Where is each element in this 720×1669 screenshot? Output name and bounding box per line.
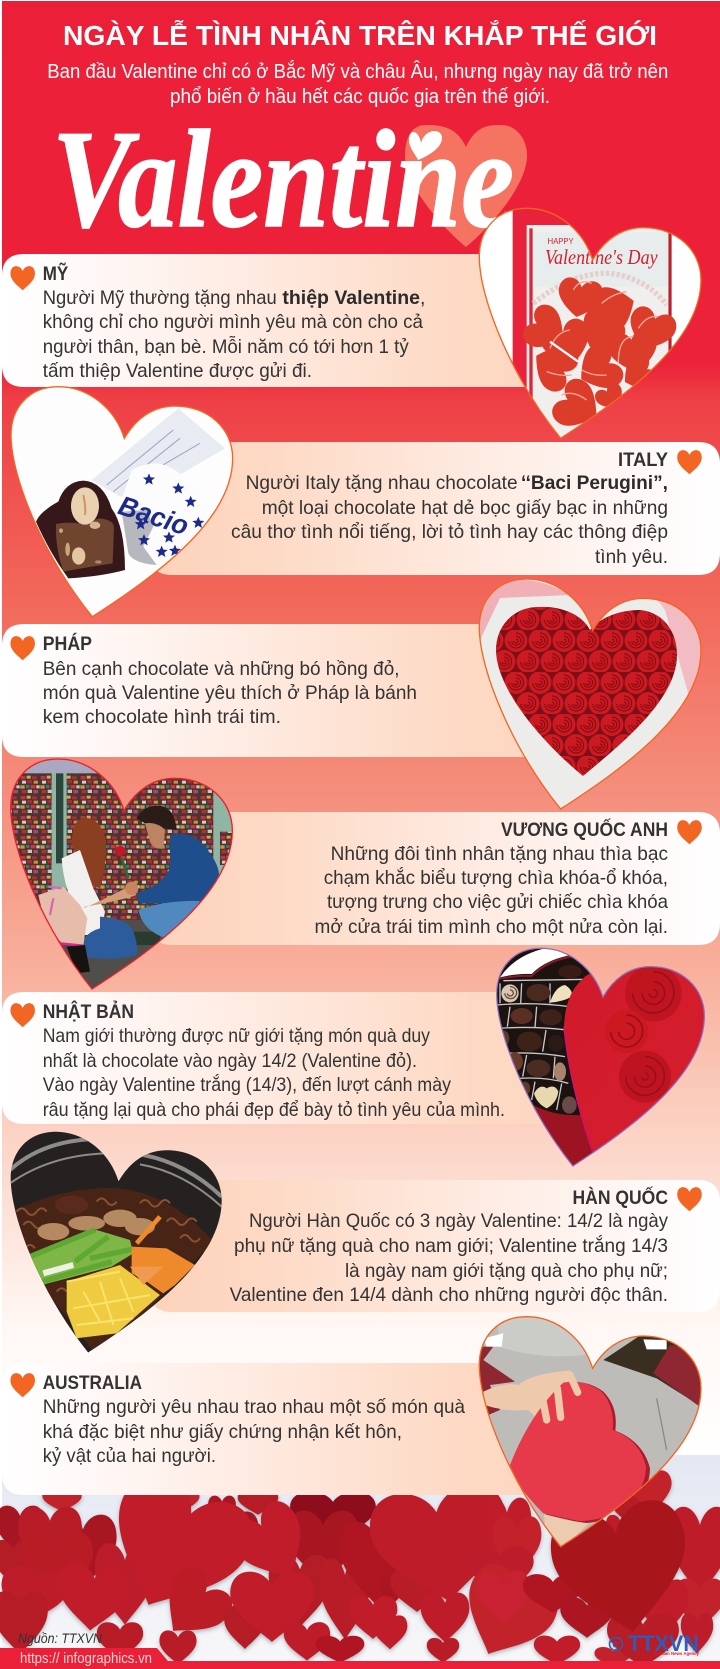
body text	[43, 1025, 505, 1121]
heart photo: chocolate box with red lid	[496, 948, 705, 1167]
heading: HÀN QUỐC	[572, 1185, 668, 1209]
body text: chạm khắc biểu tượng chìa khóa-ổ khóa,	[324, 866, 668, 889]
body text: Bên cạnh chocolate và những bó hồng đỏ,	[43, 658, 399, 680]
body text: không chỉ cho người mình yêu mà còn cho cả	[43, 311, 423, 333]
icon: orange heart	[677, 450, 702, 474]
body text: Những đôi tình nhân tặng nhau thìa bạc	[331, 843, 668, 865]
body text: Người Italy tặng nhau chocolate	[246, 472, 518, 494]
body text: câu thơ tình nổi tiếng, lời tỏ tình hay các thông điệp	[231, 521, 668, 543]
heart photo: hands holding heart-shaped box	[478, 1316, 702, 1548]
body text: người thân, bạn bè. Mỗi năm có tới hơn 1 tỷ	[43, 335, 409, 358]
body text	[231, 472, 668, 568]
subtitle	[47, 60, 668, 108]
heart photo: Valentine card with cookies: Valentine's Day	[545, 247, 658, 269]
heading: VƯƠNG QUỐC ANH	[501, 817, 668, 841]
panel: Mỹ	[2, 254, 540, 387]
body text: phụ nữ tặng quà cho nam giới; Valentine trắng 14/3	[234, 1234, 668, 1257]
TTXVN logo: c	[612, 1640, 618, 1650]
body text	[314, 843, 668, 938]
body text: Valentine đen 14/4 dành cho những người độc thân.	[230, 1284, 668, 1306]
panel background	[2, 1363, 540, 1495]
body text: Người Hàn Quốc có 3 ngày Valentine: 14/2 là ngày	[249, 1210, 668, 1232]
panel background	[2, 992, 555, 1124]
panel background	[150, 812, 720, 945]
body text: Những người yêu nhau trao nhau một số món quà	[43, 1396, 465, 1418]
icon: orange heart	[10, 1003, 35, 1027]
panel background	[2, 254, 540, 387]
panel: Nhật Bản	[2, 992, 555, 1124]
website url: https:// infographics.vn	[20, 1651, 152, 1667]
icon: orange heart	[10, 1373, 35, 1397]
body text: mở cửa trái tim mình cho một nửa còn lại.	[314, 916, 668, 938]
body text: ‘‘Baci Perugini”,	[521, 472, 668, 494]
body text: khá đặc biệt như giấy chứng nhận kết hôn,	[43, 1421, 402, 1443]
title: NGÀY LỄ TÌNH NHÂN TRÊN KHẮP THẾ GIỚI	[63, 20, 657, 51]
body text: tấm thiệp Valentine được gửi đi.	[43, 360, 312, 382]
panel background	[150, 1180, 720, 1312]
body text: kem chocolate hình trái tim.	[43, 706, 281, 728]
body text: Nam giới thường được nữ giới tặng món quà duy	[43, 1025, 430, 1047]
panel: Italy	[150, 442, 720, 575]
body text: một loại chocolate hạt dẻ bọc giấy bạc in những	[262, 497, 668, 519]
footer red bar	[0, 1648, 720, 1669]
heart photo: Baci chocolate: Bacio	[115, 490, 193, 541]
body text: râu tặng lại quà cho phái đẹp để bày tỏ tình yêu của mình.	[43, 1099, 505, 1121]
icon: orange heart	[10, 266, 35, 290]
Valentine decoration: pink heart with white heart and script word: Valentine	[52, 102, 514, 257]
body text: kỷ vật của hai người.	[43, 1445, 216, 1467]
icon: orange heart	[10, 636, 35, 660]
body text: là ngày nam giới tặng quà cho phụ nữ;	[345, 1260, 668, 1282]
body text	[43, 287, 425, 382]
heading: PHÁP	[43, 632, 92, 655]
body text	[230, 1210, 668, 1306]
body text: nhất là chocolate vào ngày 14/2 (Valentine đỏ).	[43, 1050, 417, 1072]
subtitle: Ban đầu Valentine chỉ có ở Bắc Mỹ và châu Âu, nhưng ngày nay đã trở nên	[47, 60, 668, 83]
heart photo: couple at love-lock wall	[10, 758, 233, 990]
heading: ITALY	[618, 449, 668, 471]
heading: MỸ	[43, 262, 68, 285]
source credit: Nguồn: TTXVN	[18, 1630, 103, 1646]
body text: Người Mỹ thường tặng nhau	[43, 287, 277, 309]
body text	[43, 658, 417, 728]
heart photo: Korean black noodles	[10, 1132, 222, 1352]
panel: Vương Quốc Anh	[150, 812, 720, 945]
icon: orange heart	[677, 1187, 702, 1211]
panel background	[2, 624, 540, 757]
subtitle: phổ biến ở hầu hết các quốc gia trên thế giới.	[170, 86, 550, 108]
body text: Vào ngày Valentine trắng (14/3), đến lượt cánh mày	[43, 1073, 451, 1096]
heading: AUSTRALIA	[43, 1372, 142, 1394]
panel background	[150, 442, 720, 575]
body text: tượng trưng cho việc gửi chiếc chìa khóa	[327, 891, 668, 913]
TTXVN logo: TTXVN	[628, 1631, 699, 1656]
heart photo: Valentine card with cookies: HAPPY	[548, 237, 574, 246]
body text: ,	[420, 287, 425, 309]
heart photo: Baci chocolate	[10, 386, 234, 618]
body text: món quà Valentine yêu thích ở Pháp là bánh	[43, 682, 417, 704]
panel: Hàn Quốc	[150, 1180, 720, 1312]
TTXVN logo: Vietnam News Agency	[653, 1651, 699, 1656]
heart photo: Valentine card with cookies	[478, 208, 702, 439]
icon: orange heart	[677, 820, 702, 844]
heart photo: roses arranged as a heart	[478, 578, 702, 810]
panel: Australia	[2, 1363, 540, 1495]
body text: tình yêu.	[595, 546, 668, 568]
heading: NHẬT BẢN	[43, 999, 134, 1023]
body text	[43, 1396, 465, 1467]
bottom photo: scattered red paper hearts	[0, 1455, 720, 1669]
body text: thiệp Valentine	[282, 287, 420, 309]
panel: Pháp	[2, 624, 540, 757]
footer: source, url tab and logo	[0, 1630, 720, 1669]
